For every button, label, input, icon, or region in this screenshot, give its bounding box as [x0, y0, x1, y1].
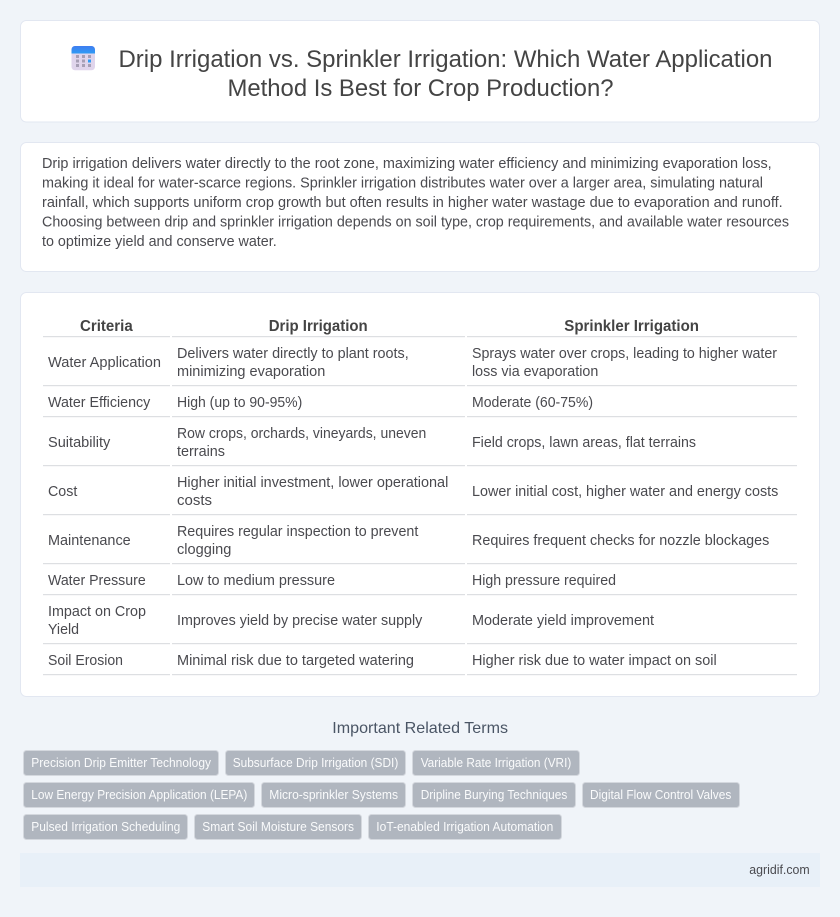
panel: header — [20, 20, 820, 122]
table row: soil erosion: Higher risk due to water impact on soil — [472, 653, 717, 669]
tag: variable rate irrigation: Variable Rate Irrigation (VRI) — [421, 756, 571, 770]
table row: soil erosion: Minimal risk due to targeted watering — [177, 653, 414, 669]
tag: precision drip emitter technology — [24, 750, 218, 776]
table row: water application: Water Application — [48, 355, 161, 371]
icon: calendar — [72, 46, 95, 70]
table row: maintenance — [48, 524, 769, 558]
table row: maintenance: clogging — [177, 542, 231, 558]
text block: summary paragraph: Choosing between drip and sprinkler irrigation depends on soil type, crop requirements, and available water resources — [42, 214, 789, 230]
table row: suitability: Suitability — [48, 435, 111, 451]
table row: water pressure — [48, 573, 616, 589]
tag: micro-sprinkler systems — [262, 782, 406, 808]
tag: subsurface drip irrigation — [226, 750, 406, 776]
table row: water efficiency — [48, 395, 593, 411]
table row: water efficiency: Moderate (60-75%) — [472, 395, 593, 411]
table row: impact on crop yield: Moderate yield improvement — [472, 613, 654, 629]
text block: summary paragraph — [42, 156, 789, 250]
tag: dripline burying techniques: Dripline Burying Techniques — [421, 788, 567, 802]
table row: impact on crop yield: Impact on Crop — [48, 604, 146, 620]
table row: cost — [48, 475, 778, 509]
title: Drip Irrigation vs. Sprinkler Irrigation: Which Water Application — [118, 46, 772, 73]
tag: iot-enabled irrigation automation — [368, 814, 562, 840]
table row: impact on crop yield — [48, 604, 654, 638]
table row: soil erosion: Soil Erosion — [48, 653, 123, 669]
table row: water pressure: High pressure required — [472, 573, 616, 589]
panel: comparison table — [20, 292, 820, 696]
tag: variable rate irrigation — [412, 750, 580, 776]
table row: impact on crop yield: Improves yield by precise water supply — [177, 613, 423, 629]
footer bar: agridif.com — [749, 862, 810, 877]
table row: water efficiency: High (up to 90-95%) — [177, 395, 302, 411]
table header row: Sprinkler Irrigation — [564, 318, 699, 335]
text block: summary paragraph: making it ideal for water-scarce regions. Sprinkler irrigation distributes water over a larger area, simulating natural — [42, 176, 763, 192]
table row: suitability — [48, 426, 696, 460]
table row: water pressure: Water Pressure — [48, 573, 146, 589]
tag: pulsed irrigation scheduling — [24, 814, 188, 840]
table row: water application: Delivers water directly to plant roots, — [177, 346, 409, 362]
table row: water application: minimizing evaporation — [177, 364, 325, 380]
footer bar — [20, 853, 820, 887]
related terms tags — [24, 750, 740, 840]
tag: precision drip emitter technology: Precision Drip Emitter Technology — [31, 756, 212, 770]
text block: summary paragraph: rainfall, which supports uniform crop growth but often results in higher water wastage due to evaporation and runoff. — [42, 195, 783, 211]
table row: cost: Lower initial cost, higher water and energy costs — [472, 484, 778, 500]
tag: digital flow control valves — [582, 782, 740, 808]
tag: LEPA — [24, 782, 254, 808]
table row: maintenance: Maintenance — [48, 533, 131, 549]
tag: subsurface drip irrigation: Subsurface Drip Irrigation (SDI) — [233, 756, 398, 770]
table header row: Criteria — [80, 318, 133, 335]
table row: cost: Higher initial investment, lower operational — [177, 475, 448, 491]
table row: impact on crop yield: Yield — [48, 622, 79, 638]
table row: maintenance: Requires regular inspection to prevent — [177, 524, 418, 540]
table row: water application: loss via evaporation — [472, 364, 598, 380]
table row: cost: costs — [177, 493, 212, 509]
heading: important related terms: Important Related Terms — [332, 720, 508, 737]
title: Method Is Best for Crop Production? — [228, 75, 614, 102]
table row: suitability: Field crops, lawn areas, flat terrains — [472, 435, 696, 451]
text block: summary paragraph: Drip irrigation delivers water directly to the root zone, maximizing water efficiency and minimizing evaporation loss, — [42, 156, 772, 172]
table row: suitability: terrains — [177, 444, 225, 460]
tag: LEPA: Low Energy Precision Application (LEPA) — [31, 788, 247, 802]
table header row: Drip Irrigation — [269, 318, 368, 335]
table row: soil erosion — [48, 653, 717, 669]
table row: water efficiency: Water Efficiency — [48, 395, 151, 411]
table row: water pressure: Low to medium pressure — [177, 573, 335, 589]
table row: cost: Cost — [48, 484, 77, 500]
tag: iot-enabled irrigation automation: IoT-enabled Irrigation Automation — [376, 820, 553, 834]
table row: suitability: Row crops, orchards, vineyards, uneven — [177, 426, 426, 442]
table row: water application: Sprays water over crops, leading to higher water — [472, 346, 777, 362]
tag: smart soil moisture sensors — [194, 814, 362, 840]
panel: introduction — [20, 142, 820, 272]
table row: water application — [48, 346, 777, 380]
tag: digital flow control valves: Digital Flow Control Valves — [590, 788, 731, 802]
table row: maintenance: Requires frequent checks for nozzle blockages — [472, 533, 769, 549]
table header row — [80, 318, 699, 335]
tag: micro-sprinkler systems: Micro-sprinkler Systems — [269, 788, 398, 802]
title — [118, 46, 772, 102]
tag: pulsed irrigation scheduling: Pulsed Irrigation Scheduling — [31, 820, 180, 834]
tag: dripline burying techniques — [412, 782, 576, 808]
tag: smart soil moisture sensors: Smart Soil Moisture Sensors — [202, 820, 354, 834]
text block: summary paragraph: to optimize yield and conserve water. — [42, 234, 277, 250]
